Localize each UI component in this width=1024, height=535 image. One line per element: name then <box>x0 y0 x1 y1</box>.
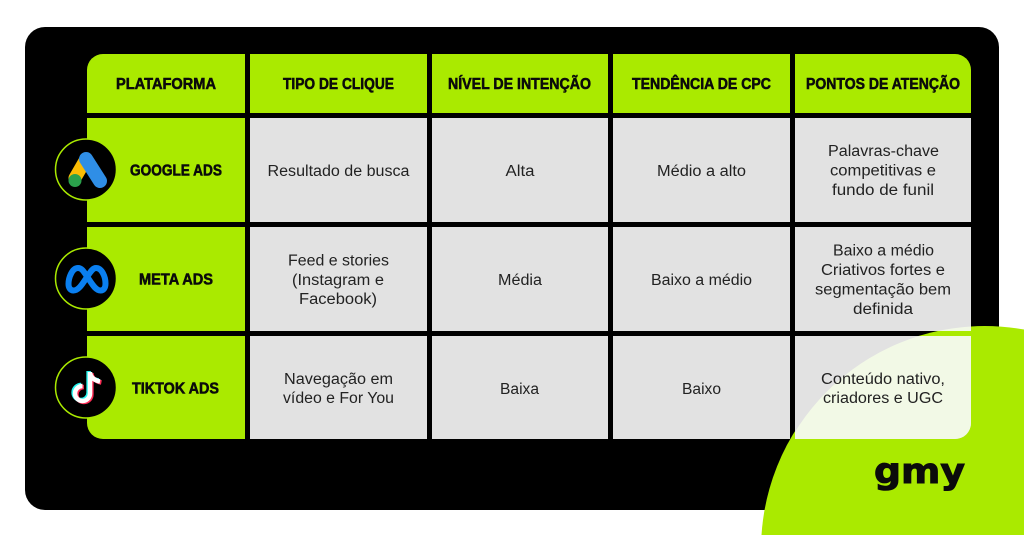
platform cell: tiktok ads: TIKTOK ADS <box>132 380 219 398</box>
cell: tipo de clique meta <box>250 227 427 331</box>
cell: tipo de clique tiktok: vídeo e For You <box>283 390 394 407</box>
cell: pontos google: competitivas e <box>830 162 936 180</box>
row: tiktok ads <box>87 336 971 439</box>
cell: tipo de clique tiktok: Navegação em <box>284 371 393 388</box>
cell: tipo de clique meta: (Instagram e <box>292 272 384 289</box>
cell: cpc meta <box>613 227 790 331</box>
cell: cpc tiktok: Baixo <box>682 381 721 398</box>
header: pontos de atencao <box>795 54 971 113</box>
platform cell: google ads: GOOGLE ADS <box>130 162 222 180</box>
header: plataforma: PLATAFORMA <box>116 76 216 93</box>
logo: gmy: gmy <box>874 452 965 492</box>
header row <box>87 54 971 113</box>
cell: pontos meta: segmentação bem <box>815 282 951 298</box>
icon: tiktok <box>56 357 116 418</box>
cell: pontos tiktok <box>795 336 971 439</box>
row: meta ads <box>87 227 971 331</box>
header: pontos de atencao: PONTOS DE ATENÇÃO <box>806 75 960 93</box>
table <box>87 54 971 439</box>
cell: pontos meta: Baixo a médio <box>833 242 934 260</box>
cell: intencao meta: Média <box>498 272 542 289</box>
cell: tipo de clique tiktok <box>250 336 427 439</box>
cell: pontos tiktok: Conteúdo nativo, <box>821 371 945 388</box>
cell: cpc meta: Baixo a médio <box>651 272 752 289</box>
cell: cpc google <box>613 118 790 222</box>
cell: pontos meta: definida <box>853 301 913 318</box>
header: nivel de intencao: NÍVEL DE INTENÇÃO <box>448 75 591 93</box>
header: tendencia de cpc <box>613 54 790 113</box>
platform cell: google ads <box>87 118 245 222</box>
platform cell: meta ads: META ADS <box>139 272 213 288</box>
cell: intencao tiktok <box>432 336 608 439</box>
cell: intencao google: Alta <box>506 163 535 180</box>
header: tipo de clique <box>250 54 427 113</box>
platform cell: meta ads <box>87 227 245 331</box>
cell: pontos google: fundo de funil <box>832 182 934 199</box>
cell: tipo de clique meta: Facebook) <box>299 291 377 308</box>
green corner circle <box>762 326 1024 535</box>
row: google ads <box>87 118 971 222</box>
cell: pontos meta: Criativos fortes e <box>821 262 945 279</box>
cell: tipo de clique meta: Feed e stories <box>288 252 389 270</box>
cell: tipo de clique google: Resultado de busca <box>268 163 410 180</box>
cell: cpc tiktok <box>613 336 790 439</box>
header: nivel de intencao <box>432 54 608 113</box>
header: tipo de clique: TIPO DE CLIQUE <box>283 76 394 93</box>
cell: pontos tiktok: criadores e UGC <box>823 390 943 407</box>
cell: pontos google <box>795 118 971 222</box>
cell: intencao tiktok: Baixa <box>500 381 539 398</box>
icon: google ads <box>56 139 116 200</box>
cell: intencao meta <box>432 227 608 331</box>
header: plataforma <box>87 54 245 113</box>
cell: intencao google <box>432 118 608 222</box>
header: tendencia de cpc: TENDÊNCIA DE CPC <box>632 75 771 93</box>
icon: meta <box>56 248 116 309</box>
cell: pontos meta <box>795 227 971 331</box>
cell: tipo de clique google <box>250 118 427 222</box>
cell: cpc google: Médio a alto <box>657 163 746 180</box>
cell: pontos google: Palavras-chave <box>828 143 939 160</box>
platform cell: tiktok ads <box>87 336 245 439</box>
